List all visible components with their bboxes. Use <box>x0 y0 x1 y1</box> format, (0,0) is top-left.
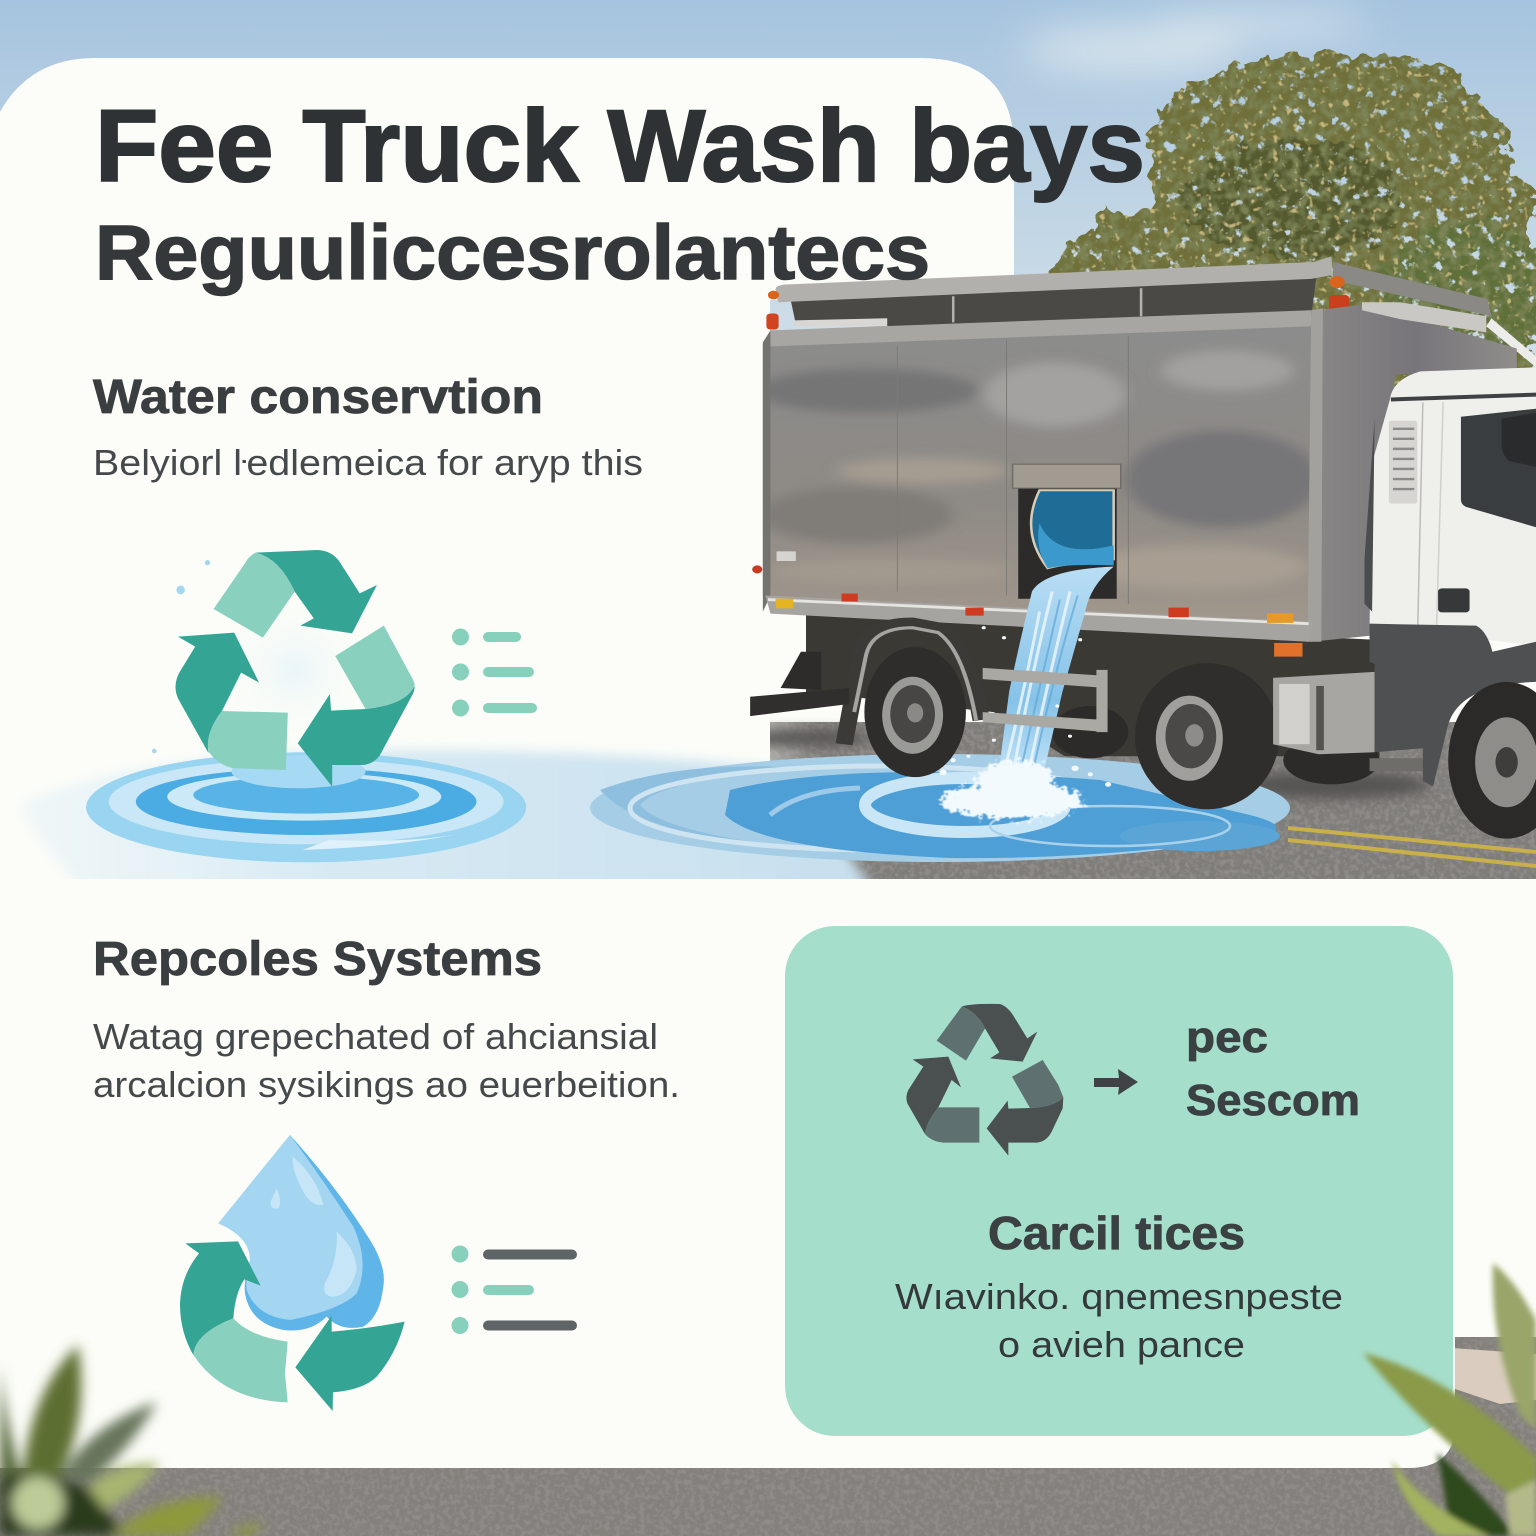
background tree <box>1045 49 1536 400</box>
panel body text: o avieh pance <box>998 1324 1245 1365</box>
title: Fee Truck Wash bays <box>95 89 1145 203</box>
panel heading: Carcil tices <box>988 1207 1245 1259</box>
box lower rail with markers <box>752 313 1311 657</box>
water stream <box>996 567 1114 790</box>
road behind truck <box>640 722 1536 880</box>
hidden rear wheels <box>1052 706 1380 784</box>
water splash <box>940 626 1111 819</box>
cargo box panel <box>755 308 1323 642</box>
road yellow lines <box>1288 828 1536 866</box>
puddle under truck <box>590 754 1290 862</box>
panel: mint callout <box>785 926 1453 1436</box>
pavement patch <box>1452 1348 1536 1404</box>
panel label: pec <box>1186 1013 1268 1062</box>
clouds <box>1020 11 1370 74</box>
lower white panel <box>0 879 1536 1468</box>
asphalt ground <box>0 1337 1536 1536</box>
wheel 1 <box>864 647 966 777</box>
cargo box side <box>1311 304 1517 642</box>
rear chassis and underbody <box>806 612 1380 756</box>
wheel 2 <box>1135 663 1279 809</box>
road shadow <box>730 730 1430 799</box>
wheel 3 <box>1448 682 1536 839</box>
subtitle: Reguuliccesrolantecs <box>95 210 930 296</box>
text: systems body <box>93 1016 680 1105</box>
heading: systems: Repcoles Systems <box>93 933 542 986</box>
panel body text <box>895 1276 1343 1365</box>
icon: recycle symbol dark <box>906 1004 1063 1156</box>
roof canopy <box>768 256 1536 367</box>
sky background <box>0 0 1536 400</box>
heading: water conservation: Water conservtion <box>93 371 543 424</box>
truck <box>750 256 1536 839</box>
icon: water drop with recycle arrows <box>180 1135 405 1411</box>
hatch opening with drum <box>1013 464 1121 599</box>
plant: bottom left <box>0 1345 265 1536</box>
panel label: Sescom <box>1186 1076 1360 1125</box>
pale water band <box>20 750 880 900</box>
panel body text: Wıavinko. qnemesnpeste <box>895 1276 1343 1317</box>
truck cab <box>1364 367 1536 786</box>
fuel tank <box>1273 672 1423 771</box>
icon: list bullets 2 <box>452 1246 577 1334</box>
text: water conservation body: Belyiorl ŀedlemeica for aryp this <box>93 442 643 483</box>
top white card <box>0 58 1014 880</box>
text: systems body: Watag grepechated of ahciansial <box>93 1016 658 1057</box>
icon: arrow <box>1094 1069 1138 1095</box>
text: systems body: arcalcion sysikings ao euerbeition. <box>93 1064 680 1105</box>
white strip left of truck <box>640 290 770 722</box>
plant: bottom right <box>1363 1263 1536 1536</box>
wheel arch and frame <box>750 624 1108 744</box>
ripple water under recycle icon <box>86 752 526 862</box>
icon: list bullets 1 <box>452 628 537 716</box>
icon: recycle symbol green <box>152 550 415 787</box>
